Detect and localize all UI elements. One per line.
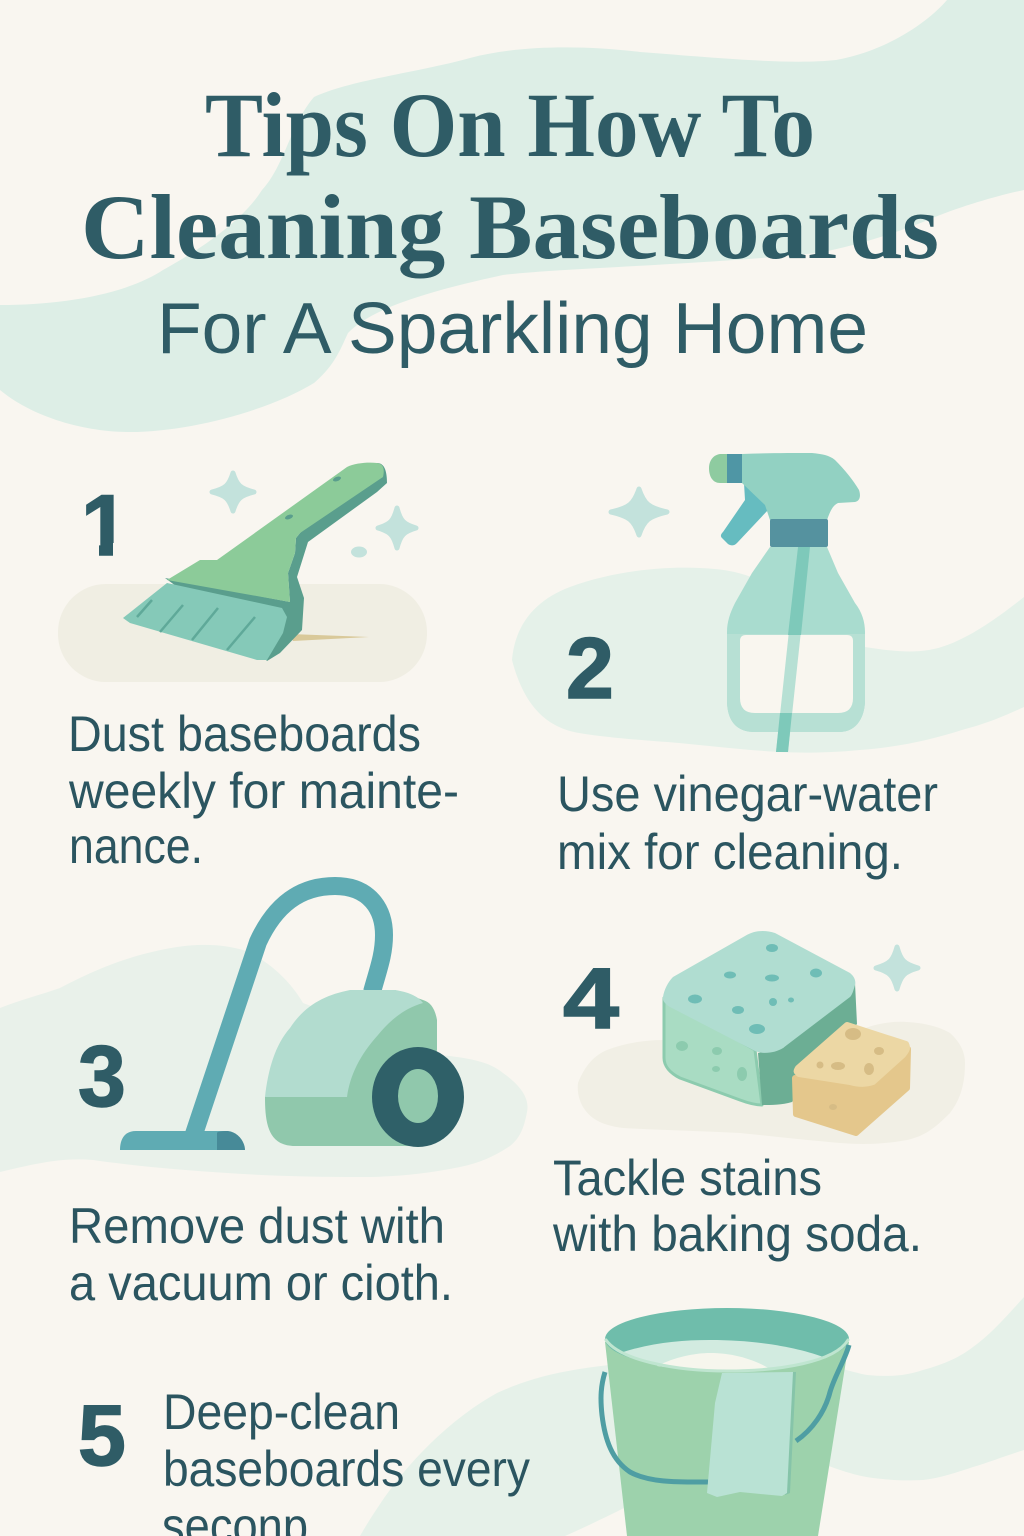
text: step 1: weekly for mainte- — [68, 763, 459, 819]
brush dark side — [165, 463, 387, 661]
hose — [194, 886, 384, 1134]
sponge top — [663, 931, 855, 1053]
text: step 4 — [552, 1150, 922, 1262]
tan sponge front — [795, 1049, 908, 1133]
text: step 2: mix for cleaning. — [557, 824, 903, 880]
panel: step 4 sponge — [552, 931, 965, 1262]
text: step 1 — [68, 706, 459, 874]
number 2: 2 — [566, 621, 614, 717]
bottle body — [727, 547, 865, 732]
handle left — [601, 1372, 708, 1482]
collar — [770, 519, 828, 547]
text: step 5: Deep-clean — [163, 1384, 400, 1440]
icon: sparkle large — [212, 473, 254, 511]
water — [620, 1340, 826, 1371]
panel: step 2 spray — [557, 453, 938, 880]
icon: sparkle dot — [351, 546, 367, 558]
tan sponge top — [797, 1025, 907, 1084]
bottle lower tint — [727, 634, 865, 732]
bristle lines — [137, 600, 255, 650]
number 3: 3 — [78, 1029, 126, 1125]
icon: spray bottle — [709, 453, 865, 752]
text: step 2 — [557, 766, 938, 880]
brush bristles — [123, 583, 287, 660]
text: step 3: a vacuum or cioth. — [69, 1255, 453, 1311]
background wave: step 2 — [512, 568, 1024, 753]
panel: step 5 bucket — [78, 1308, 849, 1536]
icon: sparkle small — [378, 508, 416, 548]
icon: tan sponge — [795, 1025, 908, 1133]
number 1: 1 — [81, 478, 129, 574]
handle holes — [285, 477, 341, 519]
number 4: 4 — [563, 951, 619, 1047]
wheel — [372, 1047, 464, 1147]
text: step 4: with baking soda. — [552, 1206, 922, 1262]
water highlight — [657, 1353, 772, 1371]
panel: step 1 dust — [58, 463, 459, 874]
wheel hub — [398, 1069, 438, 1123]
sponge pores — [688, 944, 822, 1034]
text: step 3 — [69, 1198, 453, 1311]
text: step 2: Use vinegar-water — [557, 766, 938, 822]
icon: brush — [123, 463, 387, 661]
icon: vacuum — [120, 886, 464, 1150]
floor head — [120, 1131, 245, 1150]
dirt streak — [290, 634, 369, 641]
text: step 1: Dust baseboards — [68, 706, 421, 762]
background wave: step 5 left — [360, 1362, 640, 1536]
title line 1: Tips On How To — [205, 74, 815, 176]
trigger — [721, 483, 769, 545]
sponge front — [664, 998, 762, 1105]
text: step 3: Remove dust with — [69, 1198, 445, 1254]
cloth — [707, 1372, 793, 1497]
nozzle tip — [709, 454, 727, 483]
bucket body — [605, 1342, 849, 1536]
text: step 5 — [162, 1384, 530, 1536]
icon: bucket — [601, 1308, 849, 1536]
icon: sparkle — [611, 489, 667, 535]
tan sponge pores — [816, 1028, 884, 1110]
bottle label — [740, 635, 853, 713]
text: step 5: baseboards every — [163, 1441, 530, 1497]
brush handle — [167, 463, 384, 602]
panel: step 3 vacuum — [69, 886, 464, 1311]
icon: sparkle — [876, 947, 918, 989]
rim front — [606, 1340, 848, 1371]
body upper — [265, 990, 423, 1097]
floor shadow — [58, 584, 427, 682]
cloth shadow — [785, 1372, 796, 1495]
dip tube upper — [788, 547, 810, 635]
sponge front pores — [676, 1041, 747, 1081]
title line 2: Cleaning Baseboards — [81, 176, 939, 278]
title — [81, 74, 939, 369]
text: step 4: Tackle stains — [553, 1150, 822, 1206]
background wave: step 5 right — [800, 1297, 1024, 1480]
text: step 1: nance. — [69, 818, 203, 874]
background wave: step 3 — [0, 945, 528, 1177]
subtitle: For A Sparkling Home — [157, 289, 868, 369]
nozzle band — [727, 454, 742, 483]
icon: green sponge — [663, 931, 857, 1105]
dip tube lower — [776, 713, 792, 752]
handle right — [796, 1345, 849, 1441]
spray head — [742, 453, 860, 520]
background wave: header — [0, 0, 1024, 432]
bucket interior — [605, 1308, 849, 1370]
dip tube — [776, 547, 810, 752]
floor head end — [217, 1131, 245, 1150]
sponge side — [758, 983, 857, 1105]
body lower — [265, 990, 437, 1146]
number 5: 5 — [78, 1388, 126, 1484]
floor shadow — [578, 1022, 965, 1144]
